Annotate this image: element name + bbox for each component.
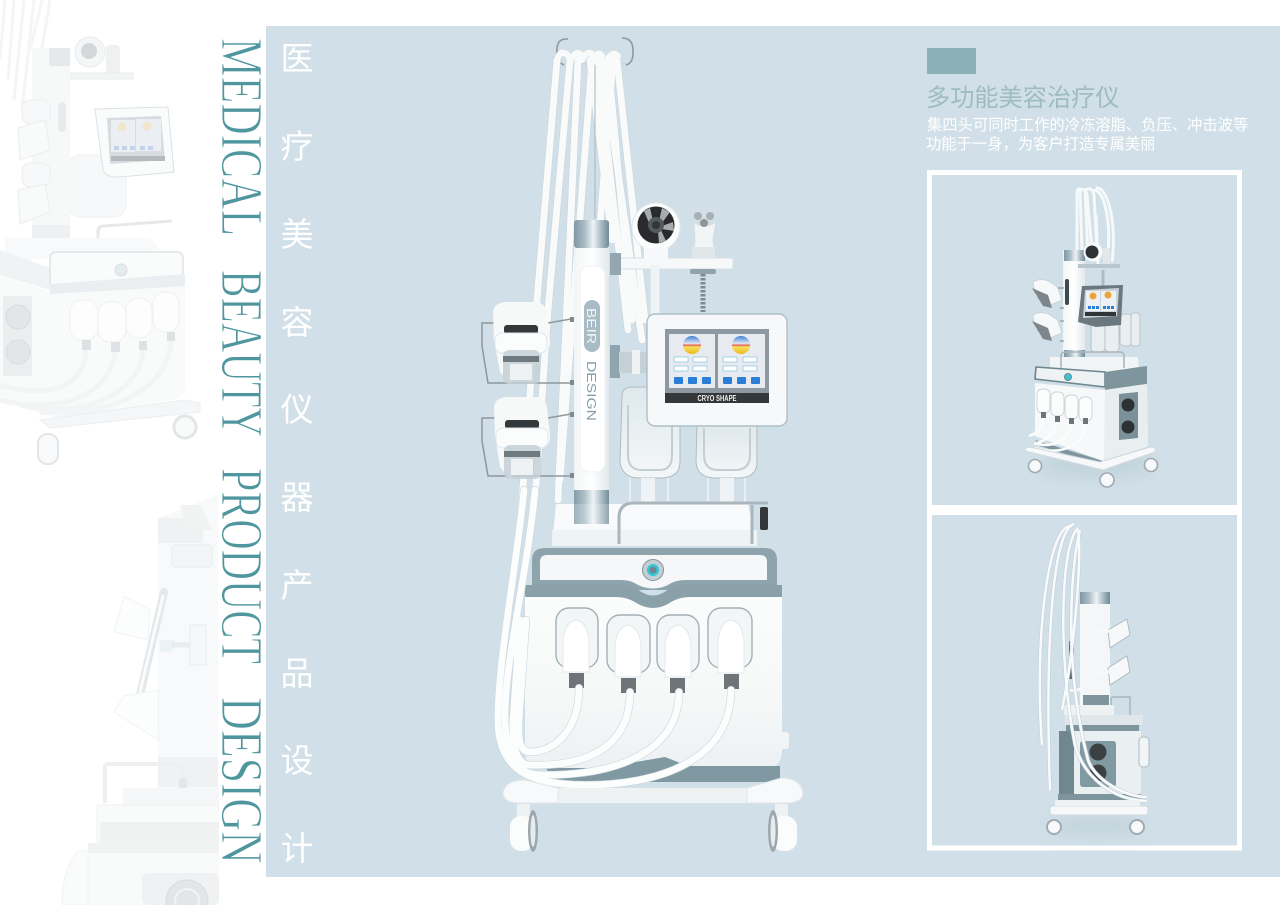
vertical English title: BEAUTY xyxy=(209,270,275,437)
machine: side view xyxy=(1040,524,1149,834)
panel: blue background xyxy=(266,26,1280,877)
console top xyxy=(525,548,782,608)
cabinet body xyxy=(525,597,782,782)
vertical Chinese title: 仪 xyxy=(280,391,314,428)
handpiece holder: lower xyxy=(482,397,574,479)
handpiece cables xyxy=(498,490,731,785)
faded machine: side view, bottom left xyxy=(62,495,219,905)
icon: camera probe xyxy=(632,203,680,259)
accessory shelf xyxy=(610,253,733,275)
vertical Chinese title: 品 xyxy=(280,655,314,692)
brand text: BEIR xyxy=(584,308,598,344)
caster: left xyxy=(510,804,538,852)
wheel base xyxy=(503,778,803,803)
design text: DESIGN xyxy=(584,361,598,421)
column xyxy=(574,220,609,525)
faded machine: three-quarter view, top left xyxy=(0,0,200,464)
vertical Chinese title: 疗 xyxy=(280,128,314,165)
cable hooks xyxy=(557,38,633,65)
arm connector to monitor xyxy=(610,345,651,378)
handle slots xyxy=(556,608,752,693)
screen logo: CRYO SHAPE xyxy=(698,394,737,403)
panel: three-quarter view frame xyxy=(930,172,1240,508)
machine: three-quarter view xyxy=(1025,188,1158,487)
icon: RF head xyxy=(691,212,716,258)
vertical English title: PRODUCT xyxy=(209,468,275,664)
product description xyxy=(926,116,1248,153)
touch screen monitor xyxy=(647,314,787,426)
color swatch xyxy=(927,48,976,74)
vertical Chinese title: 医 xyxy=(280,40,314,77)
product description: 集四头可同时工作的冷冻溶脂、负压、冲击波等 xyxy=(927,116,1248,134)
hanging cables xyxy=(522,53,645,500)
vertical Chinese title: 设 xyxy=(280,742,314,779)
vertical Chinese title: 计 xyxy=(280,830,314,867)
vertical English title xyxy=(209,38,275,864)
product heading: 多功能美容治疗仪 xyxy=(926,85,1120,112)
lower glass cups xyxy=(620,387,757,505)
brand pill xyxy=(584,300,600,352)
nub xyxy=(780,732,789,749)
icon: power button xyxy=(642,560,664,580)
caster: right xyxy=(768,804,797,852)
handle rail xyxy=(619,503,768,544)
top tray xyxy=(552,490,757,546)
panel: side view frame xyxy=(930,512,1240,848)
vertical Chinese title: 容 xyxy=(280,304,314,341)
main machine: front view xyxy=(482,38,803,852)
vertical Chinese title: 器 xyxy=(280,479,314,516)
vertical English title: MEDICAL xyxy=(209,38,275,236)
floor shadow xyxy=(1035,453,1155,477)
vertical Chinese title: 美 xyxy=(280,216,314,253)
handpiece holder: upper xyxy=(482,302,574,385)
vertical Chinese title: 产 xyxy=(280,567,314,604)
camera cable xyxy=(650,265,660,316)
RF spring cable xyxy=(700,274,706,312)
floor shadow xyxy=(1045,818,1145,834)
product description: 功能于一身，为客户打造专属美丽 xyxy=(926,136,1155,153)
vertical Chinese title xyxy=(280,40,314,867)
